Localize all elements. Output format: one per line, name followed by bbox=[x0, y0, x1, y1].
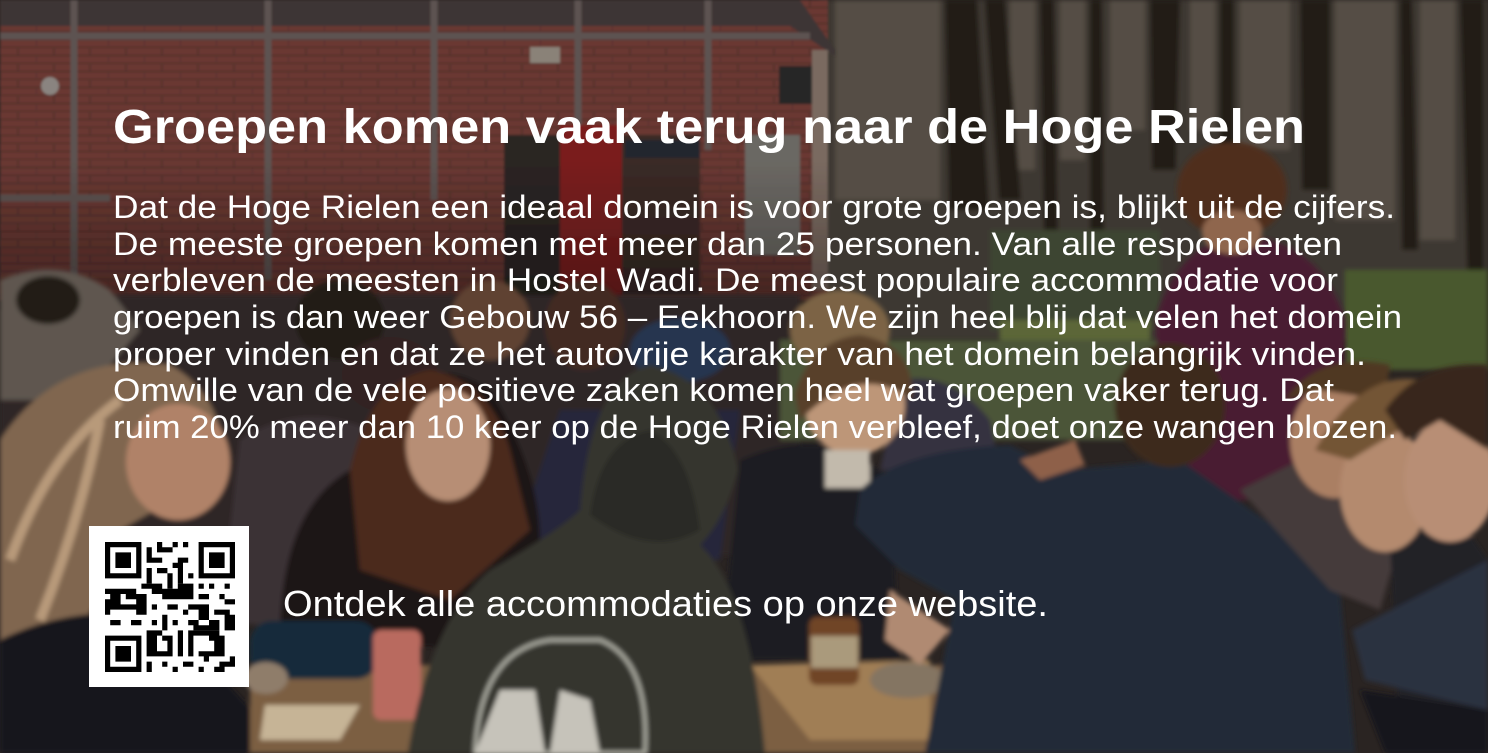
brunette girl bbox=[280, 372, 540, 650]
boys on the right bbox=[1240, 460, 1400, 610]
body text: proper vinden en dat ze het autovrije karakter van het domein belangrijk vinden. bbox=[113, 336, 1366, 372]
body text: ruim 20% meer dan 10 keer op de Hoge Rielen verbleef, doet onze wangen blozen. bbox=[113, 409, 1397, 445]
body text: Dat de Hoge Rielen een ideaal domein is voor grote groepen is, blijkt uit de cijfers. bbox=[113, 189, 1395, 225]
title: Groepen komen vaak terug naar de Hoge Rielen bbox=[113, 101, 1305, 154]
QR code bbox=[89, 526, 249, 687]
body text bbox=[113, 189, 1402, 445]
forest background bbox=[820, 0, 1488, 410]
website call to action: Ontdek alle accommodaties op onze website. bbox=[283, 583, 1048, 624]
brick building bbox=[0, 0, 835, 310]
boy middle bbox=[720, 444, 900, 660]
speaker, jar and bowl on the table bbox=[250, 621, 378, 679]
person far left, grey hoodie bbox=[0, 270, 140, 400]
hooded person from the back bbox=[408, 365, 765, 753]
person in the back, striped shirt bbox=[1155, 235, 1345, 500]
body text: Omwille van de vele positieve zaken komen heel wat groepen vaker terug. Dat bbox=[113, 372, 1334, 408]
blonde girl left bbox=[0, 363, 225, 660]
body text: De meeste groepen komen met meer dan 25 personen. Van alle respondenten bbox=[113, 226, 1342, 262]
body text: verbleven de meesten in Hostel Wadi. De meest populaire accommodatie voor bbox=[113, 262, 1338, 298]
boy from the back, blue jacket bbox=[855, 445, 1355, 753]
body text: groepen is dan weer Gebouw 56 – Eekhoorn. We zijn heel blij dat velen het domein bbox=[113, 299, 1402, 335]
background heads bbox=[295, 280, 385, 360]
table bbox=[250, 665, 960, 753]
